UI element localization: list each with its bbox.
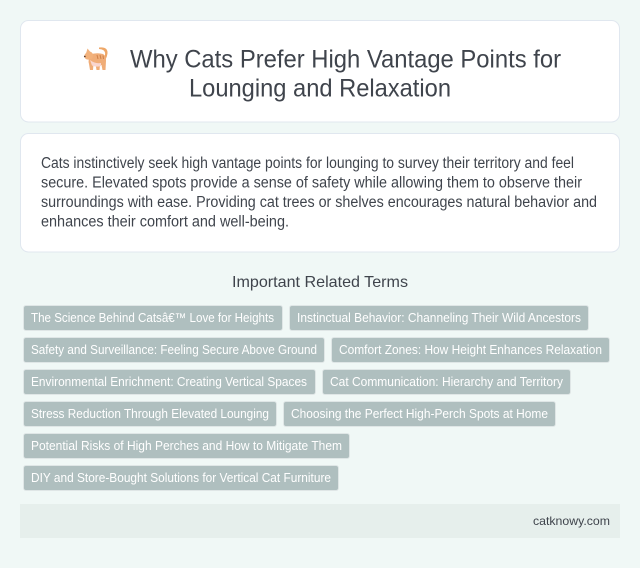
description text: Cats instinctively seek high vantage points for lounging to survey their territory and feel — [41, 155, 574, 172]
icon: cat — [84, 47, 108, 70]
tag: Potential Risks of High Perches and How to Mitigate Them — [31, 439, 342, 453]
tag — [24, 402, 276, 426]
tag: Stress Reduction Through Elevated Lounging — [31, 407, 269, 421]
heading: important related terms: Important Related Terms — [232, 274, 408, 291]
description text: enhances their comfort and well-being. — [41, 214, 289, 230]
tag: Cat Communication: Hierarchy and Territory — [330, 375, 564, 389]
description text — [41, 155, 597, 230]
tag: Safety and Surveillance: Feeling Secure Above Ground — [31, 343, 317, 357]
tag — [24, 434, 350, 458]
title text — [130, 46, 561, 102]
tag — [332, 338, 610, 362]
tag — [24, 338, 324, 362]
tag — [24, 370, 316, 394]
footer bar — [20, 504, 620, 538]
tag — [322, 370, 570, 394]
tag: Instinctual Behavior: Channeling Their Wild Ancestors — [297, 311, 581, 325]
description text: surroundings with ease. Providing cat trees or shelves encourages natural behavior and — [41, 194, 597, 211]
tag: DIY and Store-Bought Solutions for Vertical Cat Furniture — [31, 471, 331, 485]
title text: Why Cats Prefer High Vantage Points for — [130, 46, 561, 74]
tag: Environmental Enrichment: Creating Vertical Spaces — [31, 375, 307, 389]
tag — [284, 402, 556, 426]
tag: Choosing the Perfect High-Perch Spots at Home — [291, 407, 548, 421]
tag — [24, 306, 282, 330]
footer source text: catknowy.com — [533, 514, 610, 528]
tag list — [24, 306, 610, 490]
description text: secure. Elevated spots provide a sense of safety while allowing them to observe their — [41, 174, 582, 192]
panel: title card — [20, 20, 620, 122]
title text: Lounging and Relaxation — [189, 74, 451, 102]
tag: The Science Behind Catsâ€™ Love for Heights — [31, 311, 274, 325]
panel: description card — [20, 134, 620, 252]
tag: Comfort Zones: How Height Enhances Relaxation — [339, 343, 602, 357]
tag — [290, 306, 588, 330]
tag — [24, 466, 338, 490]
